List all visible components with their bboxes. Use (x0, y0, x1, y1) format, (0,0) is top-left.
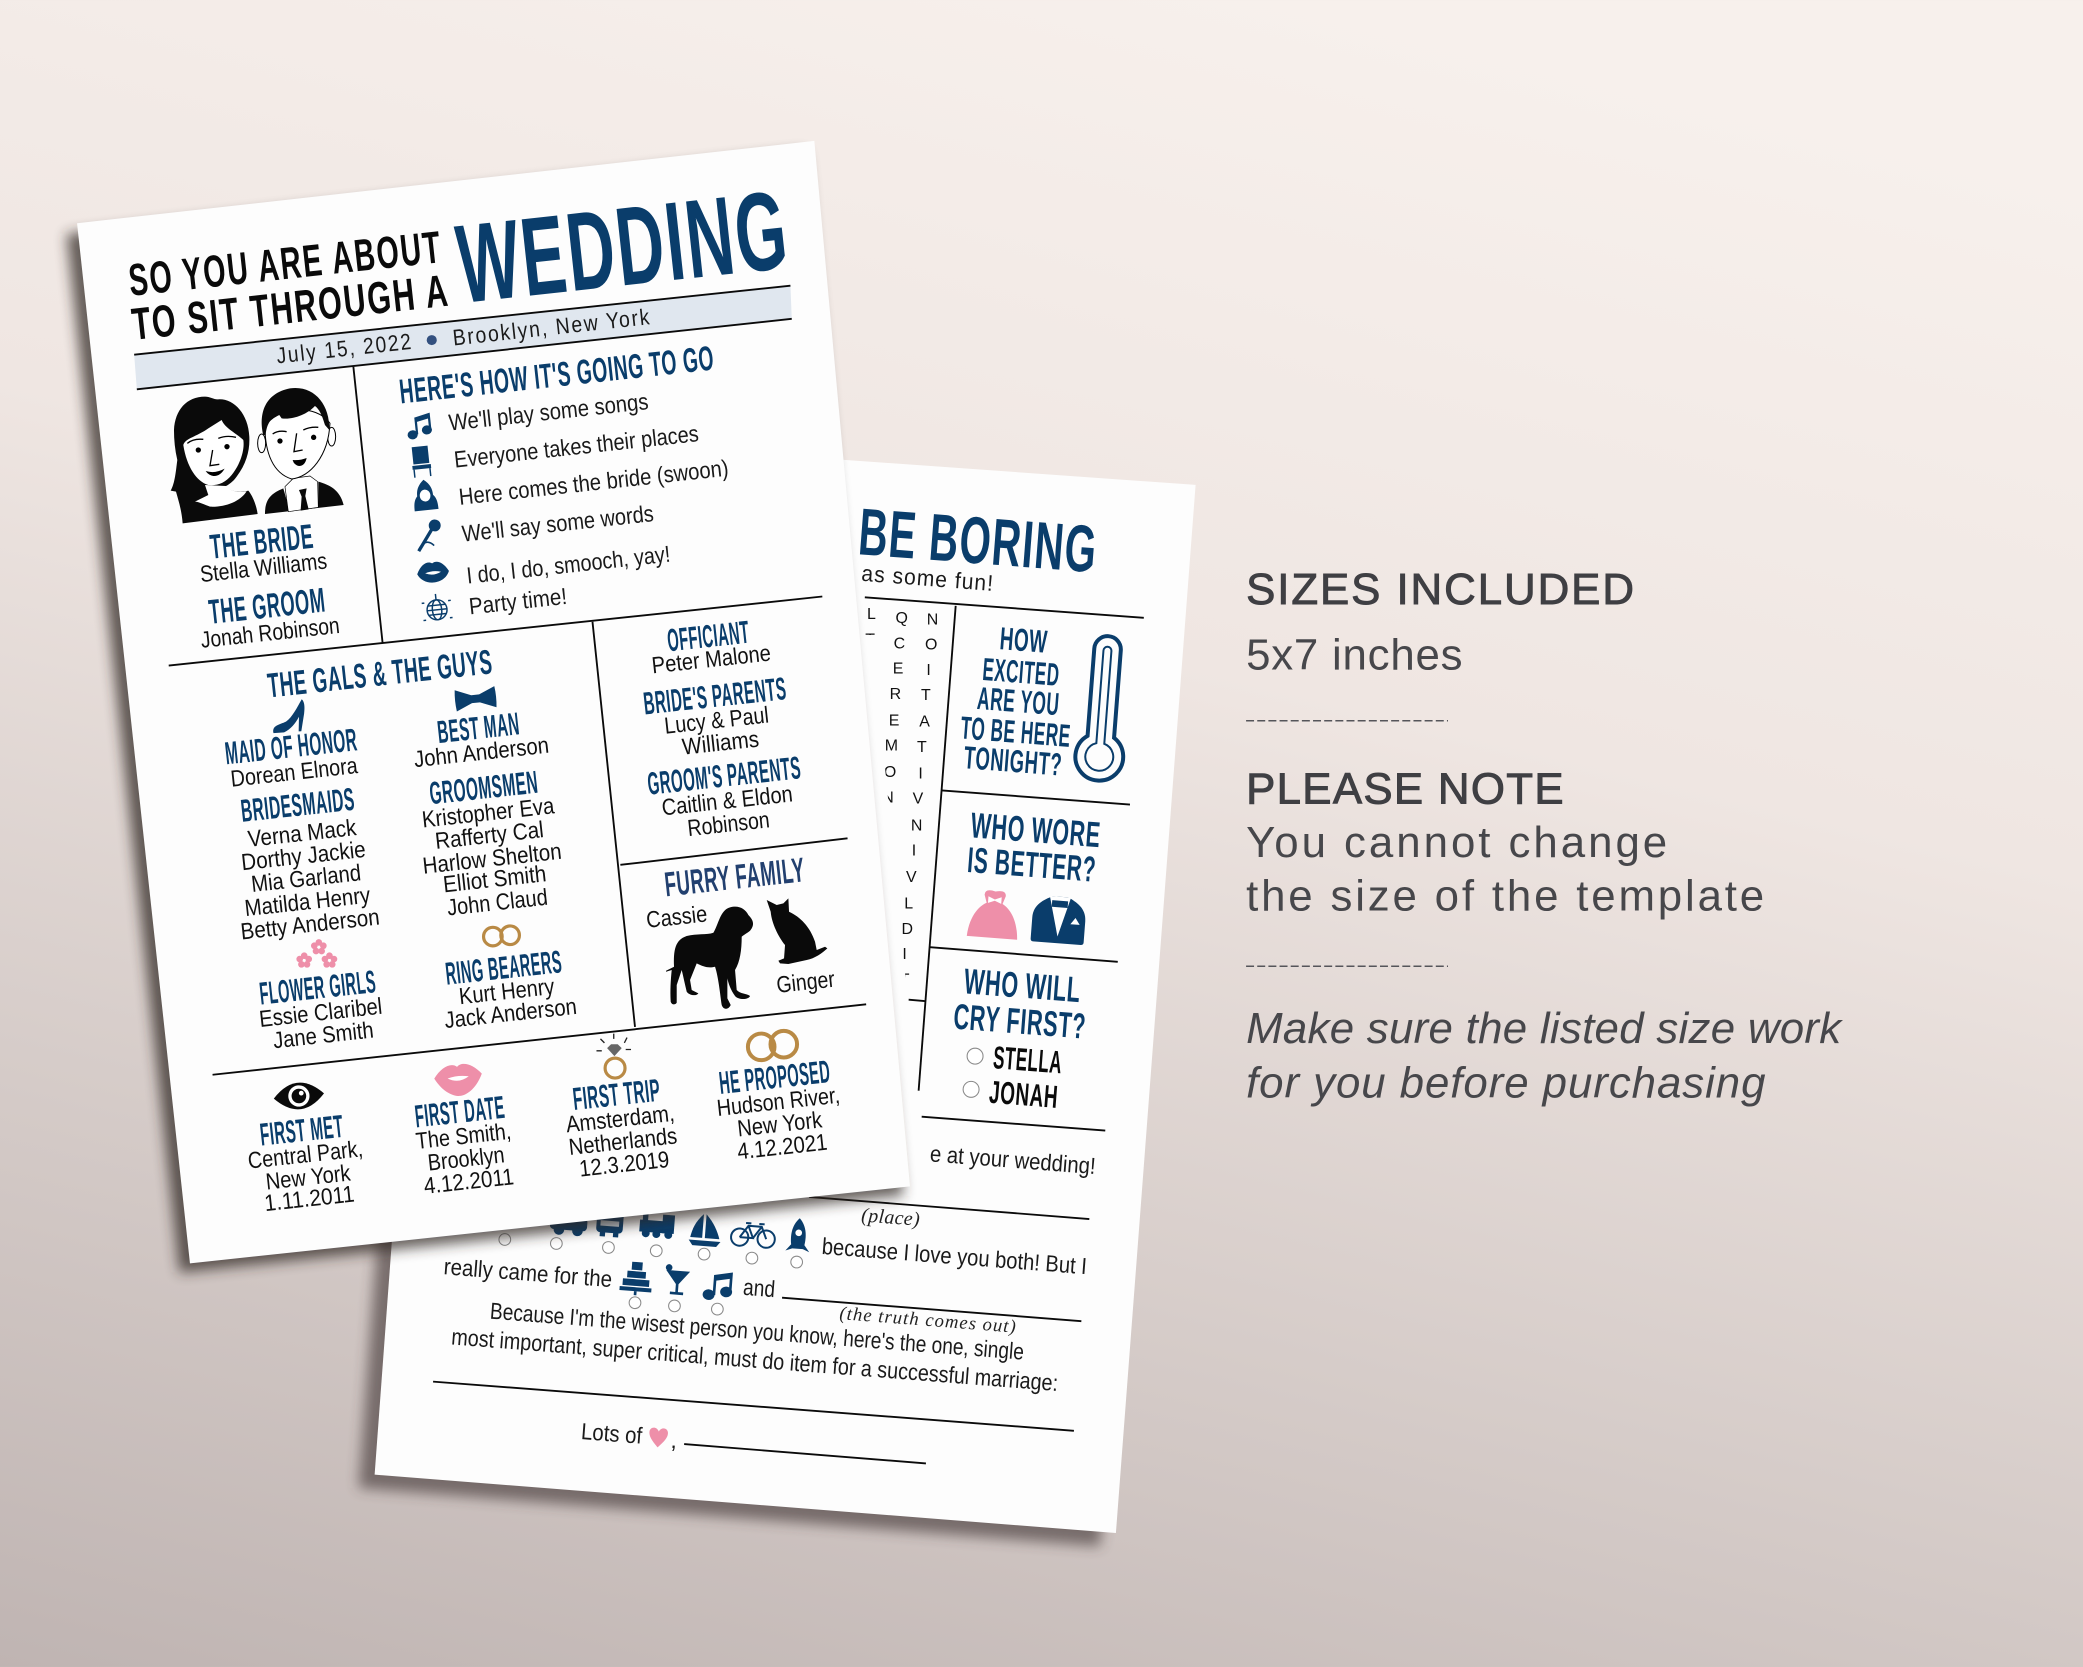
panel: order of events: Everyone takes their places (453, 420, 700, 473)
icon: gold rings (748, 1031, 797, 1060)
groom (258, 388, 344, 514)
word search letters: E (893, 661, 903, 678)
word search letters: T (865, 631, 875, 648)
panel: order of events (398, 340, 730, 621)
panel: he proposed: Hudson River, (715, 1082, 841, 1121)
italic purchase note (1246, 1004, 1843, 1107)
panel: order of events: I do, I do, smooch, yay! (465, 541, 671, 589)
illustration: bride and groom (171, 388, 344, 523)
word search letters: T (917, 739, 927, 756)
icon: cat (767, 898, 827, 964)
word search letters: M (885, 738, 898, 755)
panel: the gals and the guys: Mia Garland (250, 859, 362, 897)
mad lib text: (place) (861, 1204, 921, 1231)
text: the bride and groom: THE BRIDE (208, 518, 315, 567)
panel: the gals and the guys: John Claud (446, 884, 549, 920)
front card (66, 141, 910, 1273)
icon: thermometer (1074, 634, 1132, 782)
panel: first trip: FIRST TRIP (571, 1072, 662, 1117)
back card dividers (865, 597, 1144, 1131)
panel: officiant and parents: Williams (681, 726, 760, 760)
panel: how excited (959, 620, 1132, 783)
panel: who will cry first: WHO WILL (963, 961, 1082, 1010)
panel: officiant and parents: Lucy & Paul (663, 701, 770, 739)
word search letters: N (882, 789, 894, 806)
icon: flowers (296, 939, 337, 968)
panel: the gals and the guys: FLOWER GIRLS (258, 963, 378, 1012)
text: the bride and groom: Stella Williams (199, 547, 328, 587)
mad lib text: , (670, 1427, 678, 1453)
title: SO YOU ARE ABOUT (126, 221, 445, 306)
panel: the gals and the guys: Essie Claribel (258, 993, 383, 1032)
icons: transport choices (549, 1211, 812, 1302)
icon: music (405, 413, 433, 440)
italic purchase note: Make sure the listed size work (1246, 1004, 1843, 1053)
panel: officiant and parents (642, 614, 803, 841)
panel: order of events: HERE'S HOW IT'S GOING TO GO (398, 340, 716, 411)
mad lib text: really came for the (443, 1253, 613, 1292)
panel: who will cry first (952, 961, 1088, 1115)
panel: order of events: Here comes the bride (swoon) (458, 455, 730, 510)
panel: he proposed: 4.12.2021 (736, 1129, 829, 1164)
date band: July 15, 2022 (275, 329, 414, 368)
panel: who wore it better (966, 805, 1102, 945)
panel: the gals and the guys (223, 643, 578, 1053)
panel: the gals and the guys: Verna Mack (246, 814, 358, 852)
panel: first trip: Netherlands (567, 1122, 678, 1160)
icon: bicycle (730, 1222, 776, 1248)
answer bubbles (499, 1234, 803, 1315)
word search letters: I (902, 946, 907, 963)
icon: van (596, 1211, 624, 1238)
panel: order of events: We'll play some songs (447, 388, 650, 436)
date band (134, 286, 792, 389)
icon: music note (702, 1270, 734, 1302)
panel: please note: You cannot change (1246, 818, 1667, 867)
word search letters: C (894, 635, 905, 652)
icon: bride (412, 478, 439, 511)
panel: he proposed: New York (736, 1106, 824, 1141)
title: TO SIT THROUGH A (129, 265, 452, 350)
icon: tuxedo (1030, 895, 1087, 945)
panel: he proposed (715, 1031, 841, 1164)
panel: first trip: Amsterdam, (565, 1100, 676, 1137)
panel: first met: New York (264, 1160, 352, 1195)
icon: pink lips (433, 1062, 484, 1098)
word search letters: I (926, 662, 931, 679)
back card title: BE BORING (856, 495, 1100, 587)
panel: how excited: TO BE HERE (959, 709, 1072, 754)
text: the bride and groom: THE GROOM (207, 581, 327, 632)
word search letters: N (927, 611, 938, 628)
panel: how excited: ARE YOU (976, 680, 1061, 722)
text: the bride and groom: Jonah Robinson (199, 612, 341, 653)
word search letters: D (902, 921, 913, 938)
panel: he proposed: HE PROPOSED (717, 1053, 832, 1101)
icon: martini (664, 1264, 691, 1296)
word search letters: T (921, 687, 931, 704)
icon: sailboat (688, 1213, 723, 1247)
panel: furry family: FURRY FAMILY (663, 851, 807, 904)
word search letters: V (906, 869, 917, 886)
word search letters: V (913, 791, 924, 808)
icon: rocket (785, 1217, 812, 1252)
panel: the gals and the guys: Dorthy Jackie (240, 836, 367, 875)
panel: who will cry first: CRY FIRST? (952, 997, 1088, 1047)
panel: the gals and the guys: Betty Anderson (239, 904, 381, 944)
panel: first met: FIRST MET (258, 1108, 345, 1153)
mad lib text: e at your wedding! (929, 1140, 1097, 1179)
word search letters: N (911, 817, 922, 834)
mad lib text: and (742, 1274, 776, 1302)
panel: the gals and the guys: Jack Anderson (443, 993, 578, 1033)
panel: order of events: Party time! (468, 583, 568, 619)
icon: disco ball (421, 592, 453, 621)
mad lib text: (the truth comes out) (839, 1303, 1017, 1338)
panel: first date: The Smith, (414, 1118, 512, 1154)
panel: first met (246, 1080, 364, 1216)
panel: who will cry first: JONAH (988, 1074, 1060, 1115)
icon: heart (648, 1427, 668, 1448)
panel: sizes included: SIZES INCLUDED (1246, 565, 1634, 614)
front card: GROOM'S PARENTS (646, 749, 803, 802)
icon: bow tie (454, 686, 497, 712)
mad lib text: most important, super critical, must do item for a successful marriage: (450, 1323, 1059, 1396)
panel: first trip (565, 1034, 678, 1182)
icon: train (639, 1213, 675, 1239)
word search letters: I (912, 843, 916, 860)
title: WEDDING (451, 167, 795, 327)
panel: the gals and the guys: Kristopher Eva (421, 792, 556, 832)
word search letters: E (889, 712, 899, 729)
back card (359, 432, 1196, 1546)
mad lib text: Because I'm the wisest person you know, here's the one, single (489, 1298, 1025, 1365)
icon: lips (416, 561, 450, 584)
panel: furry family: Ginger (775, 966, 836, 998)
panel: the gals and the guys: Dorean Elnora (229, 752, 359, 792)
panel: please note: the size of the template (1246, 872, 1764, 921)
mad lib text: Lots of (580, 1418, 644, 1449)
panel: first date: FIRST DATE (413, 1089, 507, 1134)
word search letters: L (867, 606, 876, 623)
panel: the gals and the guys: Elliot Smith (442, 860, 548, 897)
panel: who will cry first: STELLA (992, 1039, 1064, 1080)
text: the bride and groom (199, 518, 341, 653)
icon: car (549, 1215, 588, 1237)
mad lib text (433, 1140, 1097, 1463)
panel: officiant and parents: OFFICIANT (665, 614, 751, 658)
panel: furry family (645, 851, 836, 1009)
icon: eye (272, 1080, 325, 1112)
icon: dog (666, 907, 753, 1009)
panel: the gals and the guys: Kurt Henry (458, 973, 556, 1009)
panel: the gals and the guys: Jane Smith (272, 1017, 375, 1053)
front card dividers (169, 367, 866, 1075)
panel: the gals and the guys: Harlow Shelton (421, 838, 563, 879)
panel: first date (413, 1062, 515, 1199)
panel: the gals and the guys: John Anderson (413, 732, 550, 772)
panel: the gals and the guys: BEST MAN (435, 705, 521, 750)
panel: how excited: TONIGHT? (963, 739, 1064, 783)
panel: order of events: We'll say some words (461, 500, 655, 547)
icon: high heel (271, 699, 306, 733)
panel: how excited: HOW (999, 620, 1049, 660)
word search letters: I (918, 766, 923, 783)
icon: wedding cake (619, 1261, 653, 1296)
word search letters: T (900, 971, 910, 988)
panel: first date: 4.12.2011 (422, 1163, 515, 1199)
word search letters: L (904, 896, 913, 913)
icon: diamond ring (596, 1034, 631, 1078)
panel: officiant and parents: Robinson (686, 806, 771, 841)
word search letters: A (919, 714, 930, 731)
panel: first trip: 12.3.2019 (578, 1146, 670, 1182)
panel: the gals and the guys: Matilda Henry (243, 882, 372, 921)
panel: the gals and the guys: THE GALS & THE GUYS (266, 643, 494, 706)
word search letters: O (925, 637, 937, 654)
word search letters (850, 606, 938, 990)
date band: Brooklyn, New York (451, 304, 652, 351)
panel: officiant and parents: Caitlin & Eldon (660, 780, 794, 820)
panel: officiant and parents: Peter Malone (650, 640, 772, 678)
panel: the gals and the guys: MAID OF HONOR (223, 721, 359, 771)
word search letters: O (884, 764, 896, 781)
panel: sizes included (1246, 565, 1634, 680)
panel: officiant and parents: BRIDE'S PARENTS (642, 670, 788, 721)
bride (171, 397, 258, 523)
panel: sizes included: 5x7 inches (1246, 631, 1463, 680)
panel: first met: Central Park, (246, 1135, 364, 1174)
panel: first met: 1.11.2011 (263, 1181, 356, 1216)
word search letters: R (890, 686, 901, 703)
panel: first date: Brooklyn (426, 1141, 506, 1176)
title (126, 167, 795, 350)
icon: rings (484, 926, 519, 946)
word search letters: Q (896, 610, 908, 627)
panel: please note: PLEASE NOTE (1246, 764, 1564, 813)
panel: how excited: EXCITED (981, 651, 1061, 693)
mad lib text: because I love you both! But I (821, 1233, 1088, 1279)
icon: microphone (416, 519, 443, 551)
panel: who wore it better: WHO WORE (969, 805, 1102, 855)
italic purchase note: for you before purchasing (1246, 1058, 1766, 1107)
panel: the gals and the guys: Rafferty Cal (434, 816, 545, 854)
panel: the gals and the guys: RING BEARERS (444, 943, 564, 992)
panel: the gals and the guys: BRIDESMAIDS (239, 781, 356, 829)
icon: chair (410, 445, 432, 478)
icon: dress (967, 889, 1021, 940)
panel: furry family: Cassie (645, 900, 708, 933)
back card subtitle: as some fun! (861, 561, 995, 596)
panel: the gals and the guys: GROOMSMEN (428, 764, 540, 811)
panel: please note (1246, 764, 1764, 921)
panel: who wore it better: IS BETTER? (966, 840, 1098, 890)
